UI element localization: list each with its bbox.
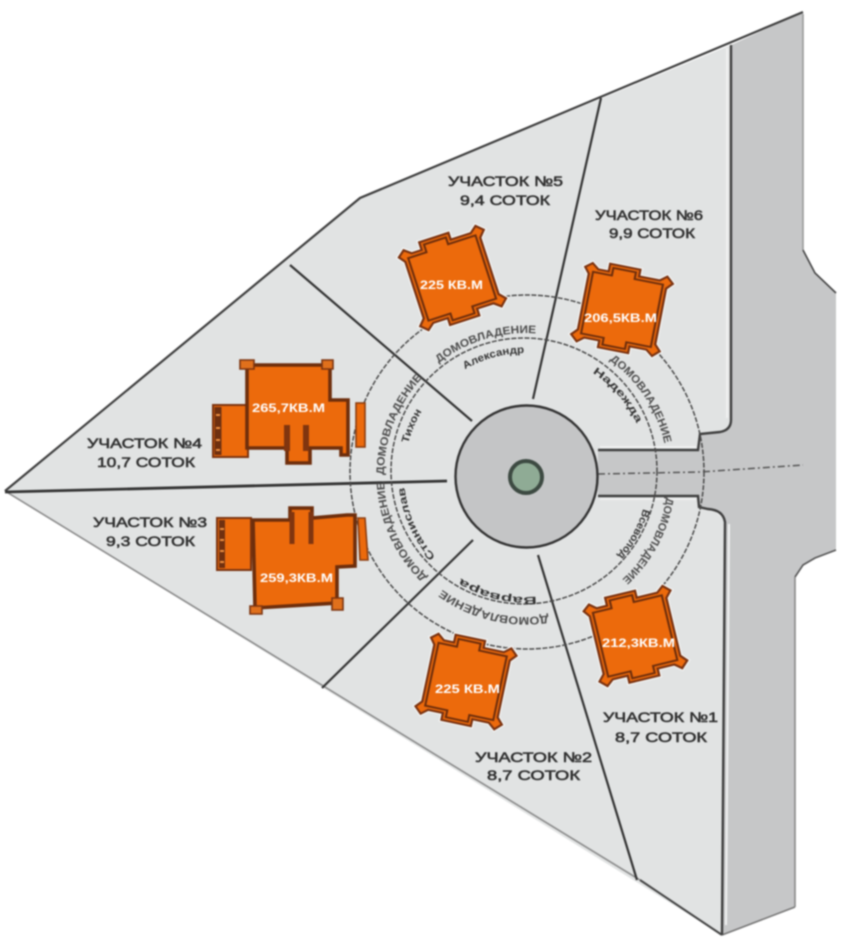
area label: 259,3КВ.М — [260, 571, 333, 585]
road light strips — [600, 48, 729, 925]
label: plot 5: УЧАСТОК №5 — [448, 173, 563, 189]
area label: 225 КВ.М — [420, 278, 483, 292]
corner knobs — [250, 598, 343, 614]
estate: top: ДОМОВЛАДЕНИЕ — [436, 324, 536, 366]
area label: 206,5КВ.М — [584, 311, 657, 325]
main body — [247, 365, 348, 463]
label: plot 2 — [475, 749, 592, 783]
estate: lower left: Станислав — [398, 487, 434, 560]
entry slots — [287, 425, 306, 451]
area label: 265,7КВ.М — [252, 401, 325, 415]
house: plot 2 — [414, 630, 518, 732]
roundabout disc — [456, 406, 598, 548]
label: plot 2: 8,7 СОТОК — [487, 767, 581, 783]
label: plot 4: 10,7 СОТОК — [97, 454, 196, 470]
road centre line — [598, 465, 803, 474]
left wing — [217, 518, 251, 570]
estate: lower left: ДОМОВЛАДЕНИЕ — [376, 484, 430, 582]
house: plot 4 — [213, 360, 365, 463]
side pillar — [356, 403, 365, 447]
label: plot 5: 9,4 СОТОК — [460, 192, 551, 208]
dividing lines between plots — [5, 98, 637, 880]
entry slots — [292, 512, 311, 544]
label: plot 1: 8,7 СОТОК — [615, 729, 708, 745]
estate: bottom: Варвара — [459, 578, 537, 606]
main body — [253, 508, 355, 608]
label: plot 3 — [93, 514, 207, 549]
left wing — [213, 405, 248, 457]
house: plot 6 — [570, 259, 674, 359]
ring text: ownership names — [376, 324, 674, 626]
area label: 212,3КВ.М — [602, 636, 675, 650]
estate: upper left: ДОМОВЛАДЕНИЕ — [376, 374, 422, 476]
label: plot 6: УЧАСТОК №6 — [595, 207, 703, 223]
house: plot 1 — [581, 583, 689, 689]
central green island — [510, 461, 542, 493]
road — [598, 12, 836, 935]
wing columns — [219, 520, 225, 568]
house: plot 5 — [395, 222, 509, 334]
estate: lower right: ДОМОВЛАДЕНИЕ — [622, 496, 674, 585]
area label: 225 КВ.М — [435, 682, 500, 696]
central roundabout — [456, 406, 598, 548]
label: plot 4 — [87, 435, 202, 470]
road edges — [598, 14, 836, 935]
main road surface — [598, 12, 836, 935]
label: plot 4: УЧАСТОК №4 — [87, 435, 202, 451]
label: plot 2: УЧАСТОК №2 — [475, 749, 592, 765]
side pillar — [358, 518, 368, 560]
label: plot 1: УЧАСТОК №1 — [603, 709, 718, 725]
label: plot 6 — [595, 207, 703, 241]
label: plot 1 — [603, 709, 718, 745]
label: plot 6: 9,9 СОТОК — [609, 225, 696, 241]
estate: bottom: ДОМОВЛАДЕНИЕ — [438, 589, 550, 626]
estate: top: Александр — [463, 346, 524, 370]
house: plot 3 — [217, 508, 368, 614]
estate: lower right: Всеволод — [615, 508, 650, 560]
label: plot 3: 9,3 СОТОК — [106, 533, 196, 549]
wing columns — [214, 407, 222, 455]
estate: upper right: Надежда — [592, 366, 642, 424]
estate: upper right: ДОМОВЛАДЕНИЕ — [608, 355, 672, 444]
estate: upper left: Тихон — [400, 408, 422, 442]
corner knobs — [240, 360, 333, 369]
label: plot 3: УЧАСТОК №3 — [93, 514, 207, 530]
dashed driveway rings — [350, 295, 704, 649]
label: plot 5 — [448, 173, 563, 208]
